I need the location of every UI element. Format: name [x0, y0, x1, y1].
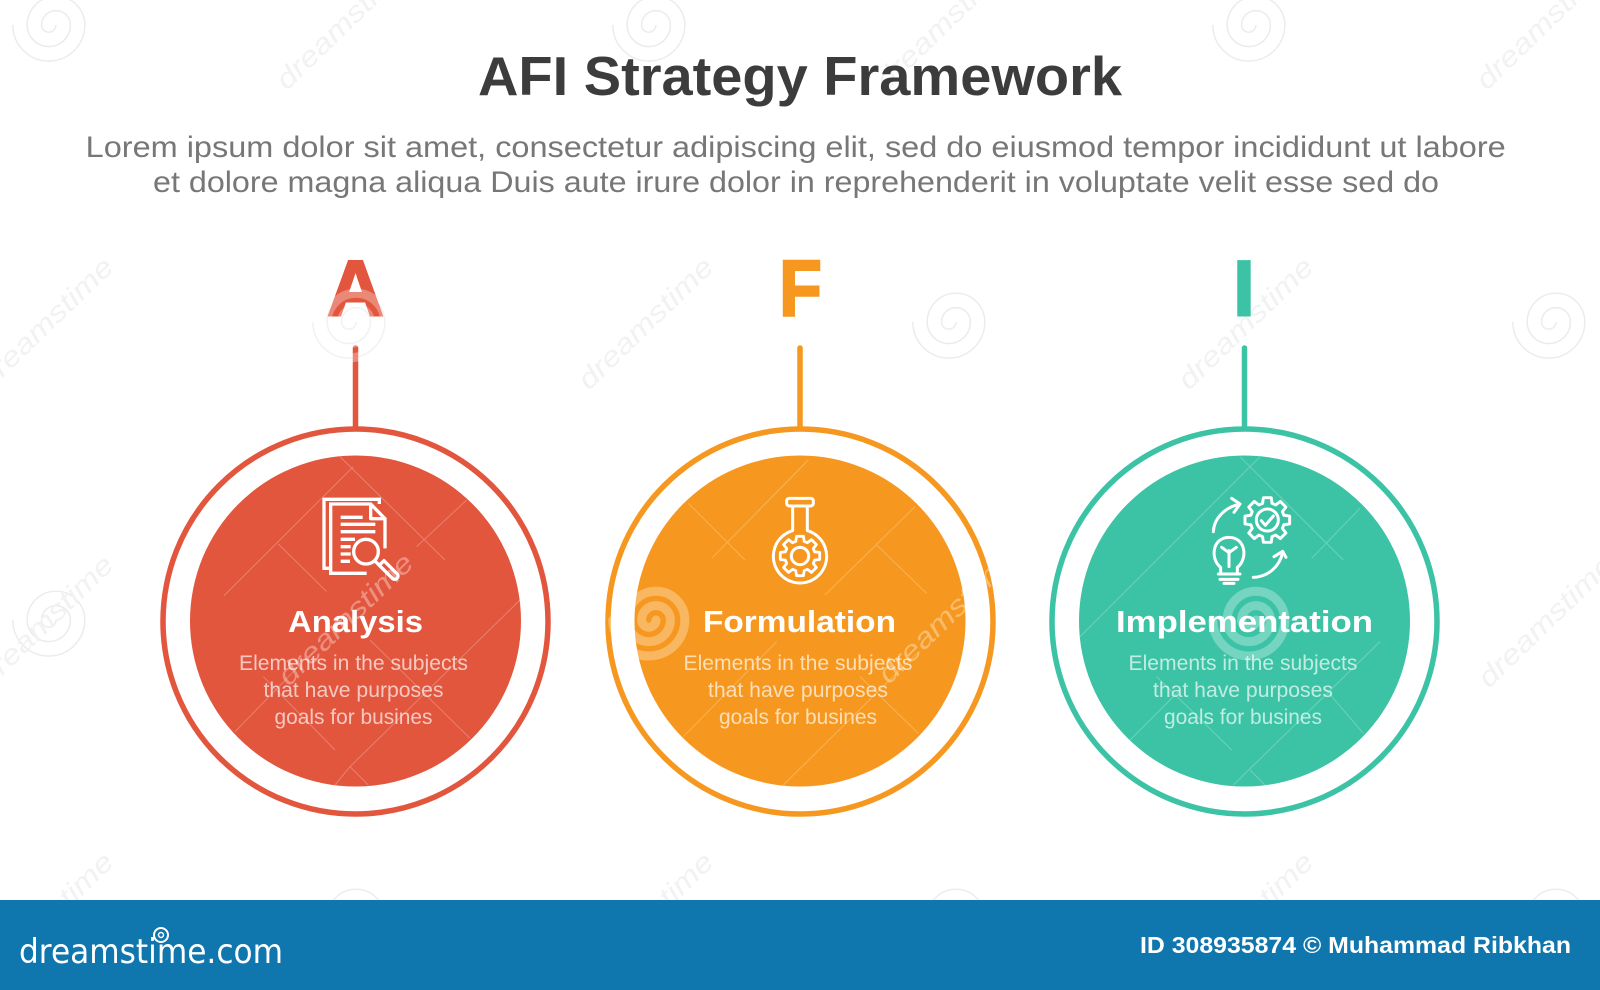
- heading Analysis: Analysis: [288, 604, 423, 639]
- outer ring F: [608, 429, 993, 814]
- description Implementation: Elements in the subjects: [1128, 651, 1358, 675]
- footer logo: dreamstime.com: [19, 932, 283, 972]
- watermark diagonal text on coloured shapes: [271, 545, 1019, 691]
- description Formulation: [684, 651, 912, 729]
- watermark diagonal text on white background: dreamstime: [571, 251, 719, 395]
- outer ring A: [163, 429, 548, 814]
- watermark diagonal text on white background: dreamstime: [1471, 549, 1600, 693]
- heading Formulation: Formulation: [703, 604, 896, 639]
- connector line I: [1242, 348, 1247, 428]
- description Formulation: Elements in the subjects: [684, 651, 912, 675]
- panel: implementation: [1052, 244, 1437, 814]
- watermark diagonal text on white background: dreamstime: [571, 846, 719, 990]
- watermark spirals on coloured shapes: [313, 293, 1285, 656]
- panel: formulation: [608, 244, 993, 814]
- description Implementation: goals for busines: [1164, 705, 1322, 729]
- connector line A: [353, 348, 358, 428]
- icon: flask with gear: [773, 498, 827, 583]
- heading Implementation: Implementation: [1116, 604, 1373, 639]
- inner disc A: [190, 456, 521, 786]
- panel: analysis: [163, 244, 548, 814]
- letter F: F: [779, 244, 822, 332]
- letter I: I: [1233, 244, 1255, 332]
- watermark diagonal text on white background: dreamstime: [1171, 846, 1319, 990]
- description Implementation: that have purposes: [1153, 678, 1333, 702]
- title: AFI Strategy Framework: [478, 45, 1122, 107]
- connector line F: [797, 348, 803, 428]
- description Formulation: that have purposes: [708, 678, 888, 702]
- watermark crossing lines: [224, 457, 1380, 785]
- icon: document with magnifier: [324, 499, 398, 579]
- watermark diagonal text on coloured shapes: dreamstime: [871, 545, 1019, 689]
- description Analysis: [239, 651, 468, 729]
- description Analysis: Elements in the subjects: [239, 651, 468, 675]
- subtitle text block: [86, 131, 1506, 199]
- inner disc F: [634, 456, 966, 786]
- inner disc I: [1079, 456, 1410, 786]
- footer bar: [0, 900, 1600, 990]
- outer ring I: [1052, 429, 1437, 814]
- description Formulation: goals for busines: [719, 705, 877, 729]
- description Analysis: that have purposes: [264, 678, 444, 702]
- letter A: A: [327, 244, 384, 332]
- subtitle text block: et dolore magna aliqua Duis aute irure dolor in reprehenderit in voluptate velit esse sed do: [153, 166, 1439, 199]
- subtitle text block: Lorem ipsum dolor sit amet, consectetur adipiscing elit, sed do eiusmod tempor incididunt ut labore: [86, 131, 1506, 164]
- icon: bulb gear cycle: [1213, 498, 1290, 583]
- description Analysis: goals for busines: [274, 705, 432, 729]
- watermark diagonal text on white background: dreamstime: [1171, 251, 1319, 395]
- watermark diagonal text on coloured shapes: dreamstime: [271, 547, 419, 691]
- description Implementation: [1128, 651, 1358, 729]
- footer credit: ID 308935874 © Muhammad Ribkhan: [1140, 932, 1571, 958]
